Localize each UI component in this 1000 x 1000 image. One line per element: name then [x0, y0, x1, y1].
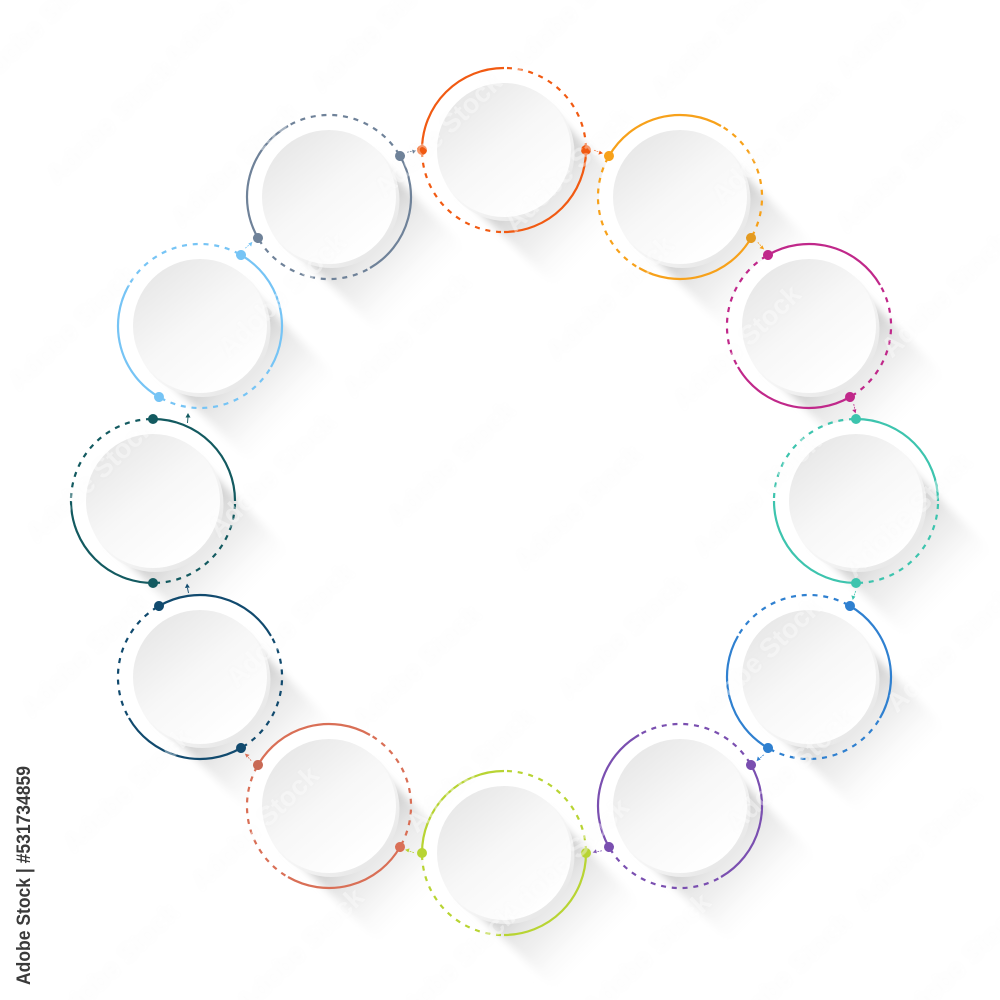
watermark pattern: Adobe Stock: [705, 73, 845, 210]
ring and connector: [417, 68, 603, 232]
watermark pattern: Adobe Stock: [687, 426, 827, 563]
watermark pattern: Adobe Stock: [495, 791, 635, 928]
ring and connector: [553, 691, 796, 927]
ring and dots: [85, 561, 315, 793]
watermark pattern: Adobe Stock: [508, 438, 648, 575]
watermark pattern: Adobe Stock: [552, 568, 692, 705]
step 7 circle: lime: [405, 771, 652, 1000]
watermark pattern: Adobe Stock: [220, 556, 360, 693]
watermark pattern: Adobe Stock: [830, 101, 970, 238]
ring and connector: [688, 561, 924, 804]
ring and connector: [85, 199, 321, 442]
watermark pattern: Adobe Stock: [2, 259, 142, 396]
watermark pattern: Adobe Stock: [347, 598, 487, 735]
watermark pattern: Adobe Stock: [540, 229, 680, 366]
ring and connector: [405, 771, 591, 935]
ring and connector: [694, 210, 930, 453]
watermark pattern: Adobe Stock: [15, 586, 155, 723]
watermark pattern: Adobe Stock: [337, 266, 477, 403]
watermark pattern: Adobe Stock: [720, 701, 860, 838]
ring and connector: [774, 414, 938, 600]
step 3 circle: magenta: [694, 210, 957, 474]
arrow: dark teal to light blue: [186, 413, 190, 423]
step 5 circle: blue: [688, 561, 957, 825]
ring and connector: [213, 76, 456, 312]
arrow: navy to dark teal: [185, 584, 190, 593]
watermark pattern: Adobe Stock: [687, 591, 827, 728]
step 8 circle: salmon: [202, 685, 477, 954]
watermark pattern: Adobe Stock: [202, 406, 342, 543]
ring and connector: [202, 685, 445, 921]
step 1 circle: orange: [417, 68, 652, 298]
step 6 circle: purple: [553, 691, 828, 954]
step 9 circle: navy: [85, 561, 348, 825]
watermark pattern: Adobe Stock: [20, 411, 160, 548]
watermark pattern: Adobe Stock: [368, 66, 508, 203]
step 2 circle: amber: [564, 82, 828, 345]
watermark pattern: Adobe Stock: [165, 96, 305, 233]
watermark pattern: Adobe Stock: [40, 53, 180, 190]
watermark pattern: Adobe Stock: [400, 701, 540, 838]
ring and connector: [564, 82, 807, 318]
watermark pattern: Adobe Stock: [838, 446, 978, 583]
step 10 circle: dark teal: [71, 413, 301, 649]
watermark pattern: Adobe Stock: [667, 278, 807, 415]
watermark pattern: Adobe Stock: [498, 101, 638, 238]
watermark pattern: Adobe Stock: [57, 721, 197, 858]
ring and dots: [71, 414, 235, 588]
watermark pattern: Adobe Stock: [848, 779, 988, 916]
step 12 circle: slate: [213, 76, 477, 345]
watermark pattern: Adobe Stock: [381, 394, 521, 531]
step 4 circle: teal: [774, 414, 1000, 649]
watermark pattern: Adobe Stock: [212, 226, 352, 363]
stock id label: Adobe Stock | #531734859: [14, 766, 35, 985]
watermark pattern: Adobe Stock: [185, 759, 325, 896]
step 11 circle: light blue: [85, 199, 348, 474]
